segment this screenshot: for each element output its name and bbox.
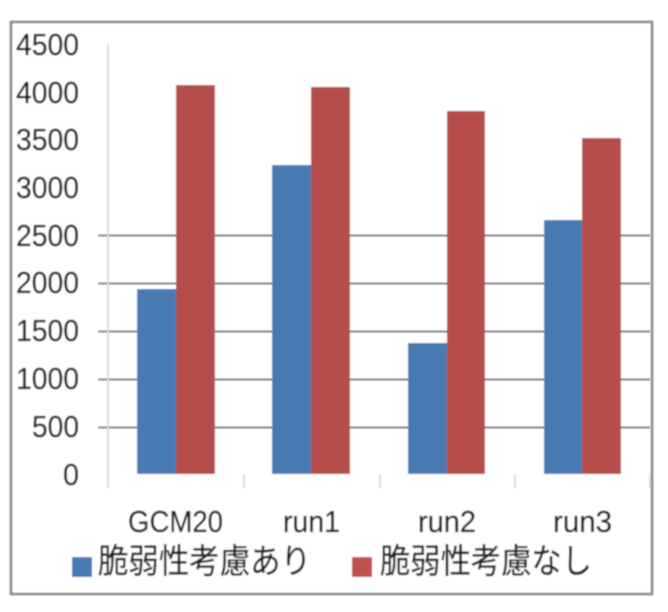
y-axis labels: 1000 xyxy=(16,361,79,396)
legend: without vulnerability: 脆弱性考慮なし xyxy=(380,543,592,581)
y-axis labels: 3500 xyxy=(16,122,79,157)
gridlines xyxy=(98,236,650,428)
y-axis labels: 2000 xyxy=(16,265,79,300)
red bars: 脆弱性考慮なし xyxy=(176,85,621,474)
x and y axes xyxy=(108,44,650,488)
blue bars: 脆弱性考慮あり xyxy=(137,165,583,474)
x-axis labels: run3 xyxy=(553,504,612,539)
x-axis labels: run2 xyxy=(418,504,476,539)
y-axis labels: 4000 xyxy=(16,75,79,110)
x-axis labels: run1 xyxy=(283,504,340,539)
x-axis labels xyxy=(128,504,612,539)
y-axis labels: 2500 xyxy=(16,218,79,253)
y-axis labels: 3000 xyxy=(16,170,79,205)
legend: with vulnerability: 脆弱性考慮あり xyxy=(98,543,311,581)
y-axis labels: 1500 xyxy=(16,313,79,348)
x-axis labels: GCM20 xyxy=(128,504,223,539)
y-axis labels xyxy=(16,27,79,492)
y-axis labels: 500 xyxy=(32,409,79,444)
y-axis labels: 4500 xyxy=(16,27,79,62)
y-axis labels: 0 xyxy=(63,457,79,492)
